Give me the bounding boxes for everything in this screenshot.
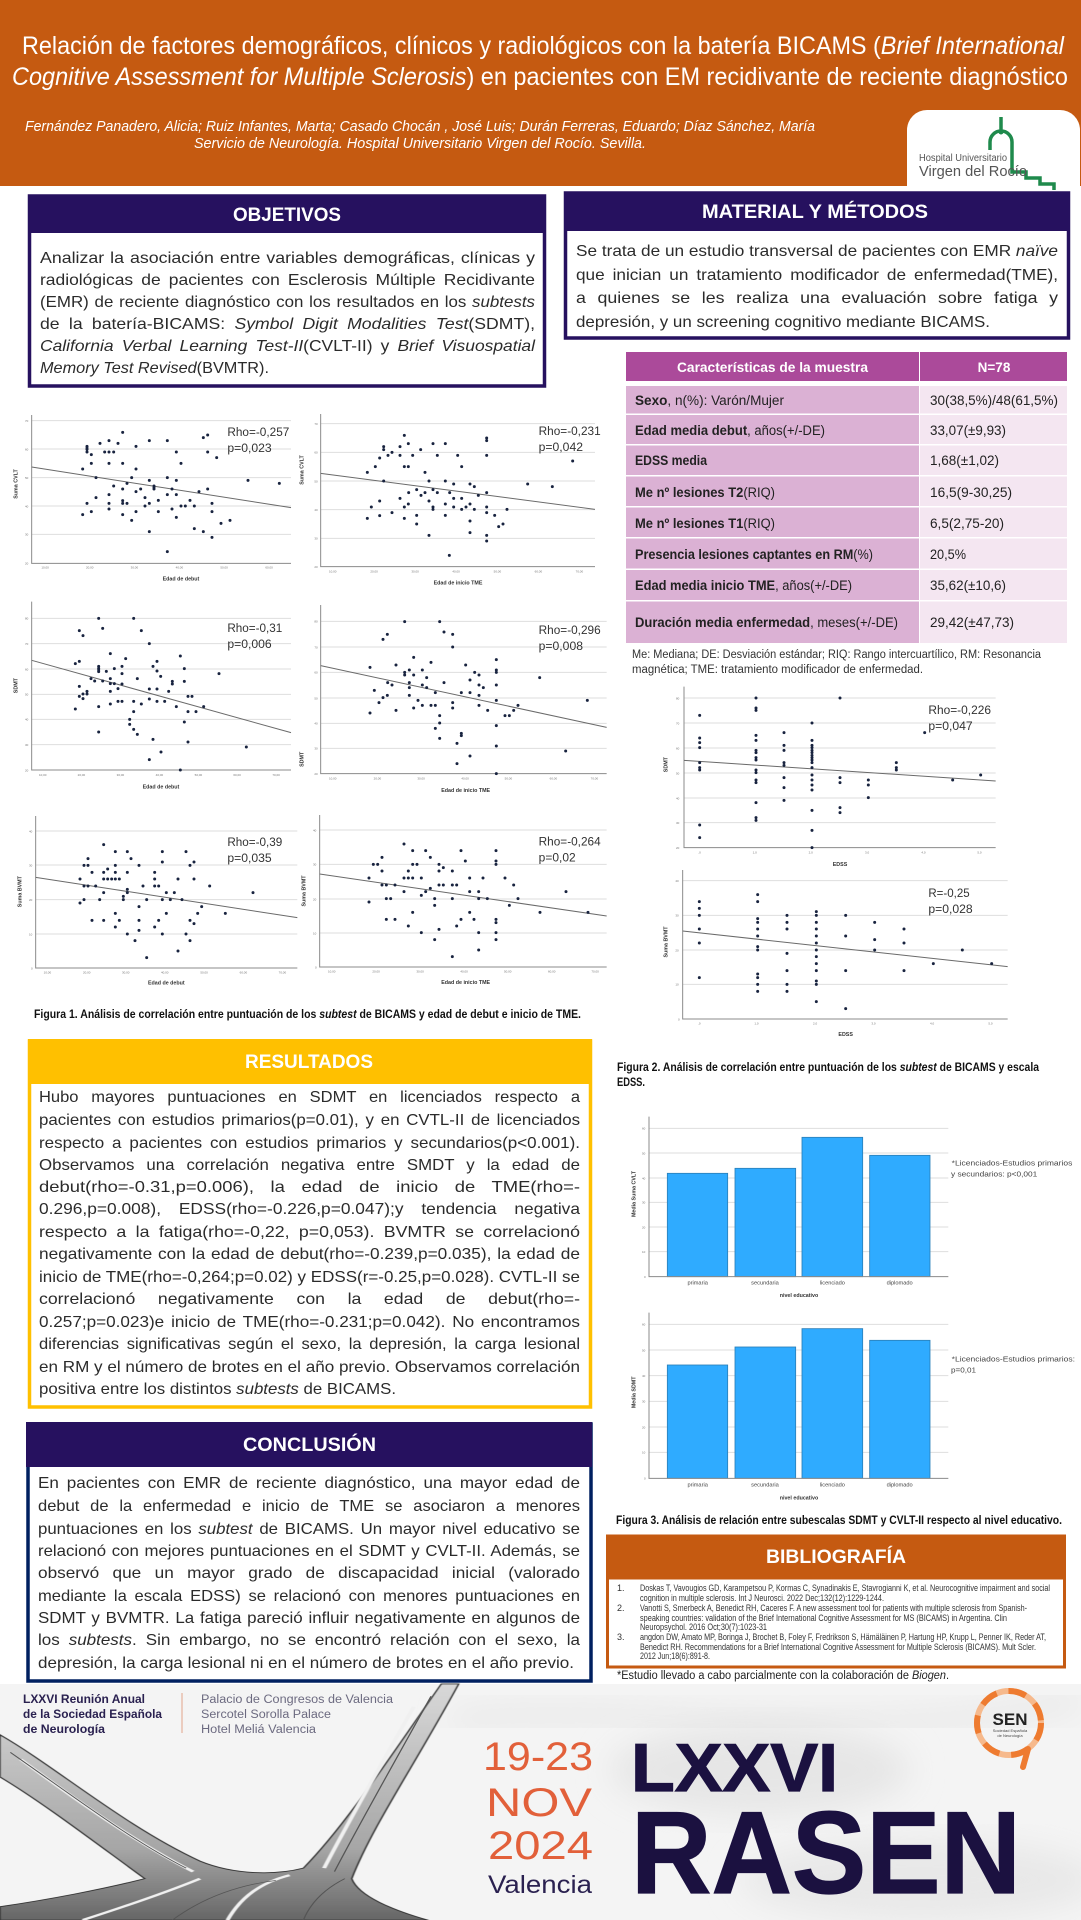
text: resultados: 0.257;p=0.023)e inicio de TME(rho=-0.231;p=0.042). No encontramos bbox=[39, 1314, 580, 1331]
scatter chart: CVLT vs edad de debut: 10,00 bbox=[41, 566, 49, 570]
scatter chart: BVMT vs edad de debut: Rho=-0,39 bbox=[227, 835, 283, 849]
scatter chart: SDMT vs EDSS: 60 bbox=[676, 746, 680, 750]
references: Neuropsychol. 2016 Oct;30(7):1023-31 bbox=[640, 1622, 767, 1632]
hospital logo: Virgen del Rocío bbox=[919, 163, 1027, 180]
text: objetivos: Memory Test Revised(BVMTR). bbox=[40, 360, 269, 377]
text: material y metodos: depresión, y un screening cognitivo mediante BICAMS. bbox=[576, 314, 990, 331]
scatter chart: SDMT vs edad de debut: 30 bbox=[25, 743, 29, 747]
scatter chart: SDMT vs edad de inicio TME: Rho=-0,296 bbox=[539, 623, 601, 637]
scatter chart: BVMT vs edad de debut: 20 bbox=[29, 898, 33, 902]
scatter chart: CVLT vs edad de debut: 40,00 bbox=[176, 566, 183, 570]
heading: material y metodos: MATERIAL Y MÉTODOS bbox=[702, 201, 928, 223]
scatter chart: SDMT vs edad de inicio TME: 80 bbox=[314, 620, 318, 624]
hospital logo bbox=[907, 110, 1080, 190]
scatter chart: BVMT vs edad de inicio TME: 70,00 bbox=[591, 969, 599, 973]
event title: LXXVI bbox=[631, 1730, 838, 1806]
SEN logo: SEN bbox=[993, 1710, 1027, 1729]
scatter chart: SDMT vs edad de inicio TME bbox=[300, 605, 607, 794]
bar chart: media suma CVLT: 40 bbox=[642, 1176, 646, 1180]
text: resultados: en RM y el número de brotes en el año previo. Observamos correlación bbox=[39, 1359, 580, 1376]
scatter chart: SDMT vs EDSS: ,0 bbox=[698, 851, 701, 855]
scatter chart: CVLT vs edad de debut: 70 bbox=[25, 419, 29, 423]
scatter chart: BVMT vs edad de debut: Suma BVMT bbox=[18, 875, 24, 907]
title bbox=[12, 32, 1068, 91]
scatter chart: CVLT vs edad de debut: p=0,023 bbox=[227, 441, 272, 455]
panel: resultados bbox=[28, 1039, 592, 1407]
scatter chart: BVMT vs EDSS: 40 bbox=[675, 879, 679, 883]
scatter chart: CVLT vs edad de inicio TME: 60 bbox=[314, 451, 318, 455]
scatter chart: SDMT vs EDSS: 50 bbox=[676, 771, 680, 775]
scatter chart: BVMT vs EDSS: p=0,028 bbox=[928, 902, 973, 916]
scatter chart: SDMT vs edad de debut: 60 bbox=[25, 667, 29, 671]
bar chart: media SDMT: primaria bbox=[687, 1483, 709, 1489]
table: sample characteristics: 6,5(2,75-20) bbox=[930, 516, 1004, 531]
bar chart: media suma CVLT: 60 bbox=[642, 1127, 646, 1131]
event title: RASEN bbox=[631, 1787, 1021, 1918]
header band bbox=[0, 0, 1081, 190]
panel: objetivos bbox=[28, 195, 546, 386]
scatter chart: BVMT vs EDSS: 4,0 bbox=[930, 1022, 934, 1026]
scatter chart: CVLT vs edad de debut: 30 bbox=[25, 533, 29, 537]
sponsor note: *Estudio llevado a cabo parcialmente con la colaboración de Biogen. bbox=[617, 1670, 949, 1682]
scatter chart: SDMT vs EDSS bbox=[663, 687, 996, 868]
scatter chart: SDMT vs edad de inicio TME: 20 bbox=[314, 772, 318, 776]
table footnote bbox=[632, 649, 1042, 676]
bar chart: media suma CVLT: secundaria bbox=[751, 1280, 780, 1286]
text: objetivos: California Verbal Learning Test-II (CVLT-II) y Brief Visuospatial bbox=[40, 338, 535, 355]
title: Relación de factores demográficos, clínicos y radiológicos con la batería BICAMS (Brief International bbox=[22, 32, 1065, 60]
panel: conclusion bbox=[26, 1422, 592, 1681]
scatter chart: SDMT vs edad de inicio TME: Edad de inicio TME bbox=[441, 788, 491, 794]
references bbox=[617, 1583, 1050, 1661]
scatter chart: SDMT vs edad de inicio TME: 60,00 bbox=[550, 777, 557, 781]
scatter chart: BVMT vs EDSS: ,0 bbox=[698, 1022, 701, 1026]
scatter chart: BVMT vs edad de inicio TME: 20 bbox=[313, 897, 317, 901]
scatter chart: SDMT vs edad de inicio TME: 50 bbox=[314, 696, 318, 700]
bar chart: media SDMT: diplomado bbox=[887, 1483, 913, 1489]
caption: figura 1: Figura 1. Análisis de correlación entre puntuación de los subtest de BICAMS y edad de debut e inicio de TME. bbox=[34, 1009, 581, 1021]
scatter chart: SDMT vs EDSS: p=0,047 bbox=[928, 719, 973, 733]
bar chart: media suma CVLT: 50 bbox=[642, 1151, 646, 1155]
authors: Fernández Panadero, Alicia; Ruiz Infantes, Marta; Casado Chocán , José Luis; Durán Ferreras, Eduardo; Díaz Sánchez, María bbox=[25, 119, 815, 135]
scatter chart: CVLT vs edad de inicio TME: 70 bbox=[314, 422, 318, 426]
bar chart: media SDMT: nivel educativo bbox=[780, 1496, 819, 1502]
scatter chart: SDMT vs EDSS: 40 bbox=[676, 796, 680, 800]
text: material y metodos bbox=[576, 243, 1058, 331]
scatter chart: SDMT vs EDSS: 1,0 bbox=[753, 851, 757, 855]
scatter chart: SDMT vs edad de debut: p=0,006 bbox=[227, 637, 272, 651]
scatter chart: SDMT vs edad de inicio TME: 50,00 bbox=[505, 777, 512, 781]
bar chart: media suma CVLT: y secundarios: p<0,001 bbox=[951, 1171, 1037, 1178]
table: sample characteristics: 16,5(9-30,25) bbox=[930, 485, 1012, 500]
scatter chart: BVMT vs EDSS bbox=[663, 870, 1008, 1038]
scatter chart: BVMT vs edad de debut: 10 bbox=[29, 932, 33, 936]
neuron image bbox=[0, 1684, 459, 1920]
text: resultados: respecto a la fatiga(rho=-0,22, p=0,053). BVMTR se correlacionó bbox=[39, 1224, 580, 1241]
scatter chart: CVLT vs edad de inicio TME: 30 bbox=[314, 537, 318, 541]
scatter chart: BVMT vs edad de debut: 40 bbox=[29, 829, 33, 833]
bar chart: media SDMT: 60 bbox=[642, 1323, 646, 1327]
scatter chart: CVLT vs edad de debut: Rho=-0,257 bbox=[227, 425, 290, 439]
text: resultados: 0.296,p=0.008), EDSS(rho=-0.226,p=0.047);y tendencia negativa bbox=[39, 1201, 580, 1218]
scatter chart: BVMT vs edad de inicio TME: 30,00 bbox=[416, 969, 424, 973]
scatter chart: SDMT vs EDSS: 80 bbox=[676, 696, 680, 700]
scatter chart: SDMT vs edad de debut: 20 bbox=[25, 768, 29, 772]
scatter chart: CVLT vs edad de inicio TME: 40,00 bbox=[452, 569, 460, 573]
scatter chart: BVMT vs EDSS: 3,0 bbox=[871, 1022, 876, 1026]
scatter chart: CVLT vs edad de debut: 40 bbox=[25, 504, 29, 508]
text: resultados: debut(rho=-0.31,p=0.006), la edad de inicio de TME(rho=- bbox=[39, 1179, 580, 1196]
scatter chart: SDMT vs EDSS: 3,0 bbox=[865, 851, 869, 855]
references: 1. bbox=[617, 1583, 625, 1593]
scatter chart: BVMT vs edad de inicio TME: 50,00 bbox=[504, 969, 512, 973]
scatter chart: SDMT vs EDSS: SDMT bbox=[663, 756, 669, 772]
scatter chart: CVLT vs edad de debut: 20 bbox=[25, 562, 29, 566]
bar chart: media suma CVLT: diplomado bbox=[887, 1280, 913, 1286]
table: sample characteristics: Presencia lesiones captantes en RM(%) bbox=[635, 547, 873, 562]
bar chart: media SDMT: secundaria bbox=[751, 1483, 780, 1489]
text: resultados: diferencias significativas según el sexo, la depresión, la carga lesional bbox=[39, 1336, 580, 1353]
scatter chart: BVMT vs edad de inicio TME: 20,00 bbox=[372, 969, 380, 973]
scatter chart: BVMT vs edad de inicio TME: 60,00 bbox=[548, 969, 556, 973]
text: material y metodos: Se trata de un estudio transversal de pacientes con EMR naïve bbox=[576, 243, 1058, 260]
scatter chart: SDMT vs edad de debut: 20,00 bbox=[78, 773, 85, 777]
text: conclusion: relacionó con mejores puntuaciones en el SDMT y CVLT-II. Además, se bbox=[38, 1543, 580, 1560]
scatter chart: BVMT vs edad de inicio TME: 0 bbox=[315, 965, 317, 969]
references: cognition in multiple sclerosis. Int J Neurosci. 2022 Dec;132(12):1229-1244. bbox=[640, 1593, 884, 1603]
bar chart: media SDMT: Media SDMT bbox=[631, 1376, 637, 1408]
authors bbox=[25, 119, 815, 152]
event title bbox=[631, 1730, 1021, 1918]
scatter chart: BVMT vs edad de inicio TME: 40 bbox=[313, 828, 317, 832]
scatter chart: SDMT vs EDSS: 5,0 bbox=[977, 851, 982, 855]
scatter chart: CVLT vs edad de debut: 50,00 bbox=[220, 566, 228, 570]
dates bbox=[483, 1735, 593, 1868]
bar chart: media suma CVLT: licenciado bbox=[820, 1280, 845, 1286]
scatter chart: SDMT vs edad de inicio TME: 40,00 bbox=[461, 777, 469, 781]
SEN logo bbox=[977, 1691, 1041, 1767]
scatter chart: BVMT vs EDSS: Suma BVMT bbox=[663, 926, 669, 958]
scatter chart: BVMT vs EDSS: 0 bbox=[678, 1017, 680, 1021]
text: objetivos: de la batería-BICAMS: Symbol Digit Modalities Test (SDMT), bbox=[40, 316, 535, 333]
bar chart: media SDMT: 0 bbox=[644, 1477, 646, 1481]
panel: bibliografia bbox=[606, 1535, 1066, 1667]
text: resultados: positiva entre los distintos subtests de BICAMS. bbox=[39, 1381, 396, 1398]
panel: material y metodos bbox=[564, 192, 1070, 338]
scatter chart: BVMT vs edad de inicio TME: 40,00 bbox=[460, 969, 468, 973]
text: objetivos: radiológicas de pacientes con Esclerosis Múltiple Recidivante bbox=[40, 272, 535, 289]
scatter chart: SDMT vs edad de debut bbox=[13, 602, 291, 790]
scatter chart: BVMT vs edad de debut: 70,00 bbox=[279, 970, 286, 974]
heading: conclusion: CONCLUSIÓN bbox=[243, 1434, 376, 1456]
scatter chart: BVMT vs edad de inicio TME: Edad de inicio TME bbox=[441, 980, 491, 986]
scatter chart: BVMT vs edad de inicio TME bbox=[302, 815, 607, 986]
scatter chart: CVLT vs edad de debut bbox=[13, 415, 291, 582]
scatter chart: SDMT vs edad de inicio TME: 20,00 bbox=[374, 777, 381, 781]
text: material y metodos: que inician un tratamiento modificador de enfermedad(TME), bbox=[576, 267, 1058, 284]
references: speaking countries: validation of the Brief International Cognitive Assessment for MS (BICAMS) in Argentina. Clin bbox=[640, 1613, 1007, 1623]
scatter chart: BVMT vs EDSS: 5,0 bbox=[988, 1022, 993, 1026]
bar chart: media SDMT: *Licenciados-Estudios primarios: bbox=[952, 1357, 1075, 1364]
title: Cognitive Assessment for Multiple Sclerosis) en pacientes con EM recidivante de reciente diagnóstico bbox=[12, 63, 1068, 91]
scatter chart: BVMT vs EDSS: 10 bbox=[675, 983, 679, 987]
text: conclusion: depresión, la carga lesional ni en el número de brotes en el año previo. bbox=[38, 1655, 574, 1672]
scatter chart: BVMT vs edad de debut: 0 bbox=[31, 966, 33, 970]
scatter chart: CVLT vs edad de inicio TME: 40 bbox=[314, 508, 318, 512]
scatter chart: CVLT vs edad de inicio TME: 60,00 bbox=[535, 569, 542, 573]
scatter chart: CVLT vs edad de inicio TME: Suma CVLT bbox=[300, 455, 306, 485]
text: conclusion: los subtests. Sin embargo, no se encontró relación con el sexo, la bbox=[38, 1632, 580, 1649]
scatter chart: SDMT vs edad de debut: Edad de debut bbox=[143, 784, 180, 790]
text: resultados: inicio de TME(rho=-0,264;p=0.02) y EDSS(r=-0.25,p=0.028). CVTL-II se bbox=[39, 1269, 580, 1286]
bar chart: media suma CVLT bbox=[631, 1117, 1073, 1299]
scatter chart: CVLT vs edad de inicio TME: 50 bbox=[314, 479, 318, 483]
SEN logo: de Neurología bbox=[997, 1733, 1023, 1738]
scatter chart: BVMT vs EDSS: 30 bbox=[675, 914, 679, 918]
scatter chart: CVLT vs edad de inicio TME: Edad de inicio TME bbox=[434, 580, 483, 586]
text: conclusion: puntuaciones en los subtest de BICAMS. Un mayor nivel educativo se bbox=[38, 1521, 580, 1538]
bar chart: media suma CVLT: 30 bbox=[642, 1201, 646, 1205]
text: conclusion: SDMT y BVMTR. La fatiga pareció influir negativamente en algunos de bbox=[38, 1610, 580, 1627]
congress name: de Neurología bbox=[23, 1724, 106, 1736]
scatter chart: SDMT vs edad de debut: 50,00 bbox=[195, 773, 202, 777]
references: 3. bbox=[617, 1632, 625, 1642]
heading: objetivos: OBJETIVOS bbox=[233, 205, 341, 226]
scatter chart: SDMT vs EDSS: EDSS bbox=[833, 862, 848, 868]
congress name: de la Sociedad Española bbox=[23, 1709, 163, 1721]
text: objetivos: (EMR) de reciente diagnóstico con los resultados en los subtests bbox=[40, 294, 535, 311]
text: conclusion: debut de la enfermedad e inicio de TME se asociaron a menores bbox=[38, 1498, 580, 1515]
scatter chart: SDMT vs edad de debut: 80 bbox=[25, 617, 29, 621]
SEN logo: Sociedad Española bbox=[993, 1728, 1028, 1733]
scatter chart: SDMT vs edad de inicio TME: 30,00 bbox=[417, 777, 425, 781]
scatter chart: SDMT vs edad de debut: 70 bbox=[25, 642, 29, 646]
bar chart: media suma CVLT: nivel educativo bbox=[780, 1293, 819, 1299]
scatter chart: SDMT vs edad de inicio TME: p=0,008 bbox=[539, 639, 583, 653]
scatter chart: SDMT vs edad de inicio TME: 70,00 bbox=[591, 777, 598, 781]
venues: Palacio de Congresos de Valencia bbox=[201, 1694, 394, 1706]
bar chart: media SDMT: p=0,01 bbox=[951, 1367, 976, 1374]
bar chart: media SDMT: 30 bbox=[642, 1400, 646, 1404]
scatter chart: SDMT vs EDSS: 30 bbox=[676, 821, 680, 825]
venues: Sercotel Sorolla Palace bbox=[201, 1709, 331, 1721]
table: sample characteristics: Duración media enfermedad, meses(+/-DE) bbox=[635, 615, 898, 630]
references: 2. bbox=[617, 1603, 625, 1613]
table: sample characteristics: N=78 bbox=[978, 360, 1011, 375]
scatter chart: SDMT vs edad de inicio TME: 30 bbox=[314, 747, 318, 751]
scatter chart: SDMT vs EDSS: Rho=-0,226 bbox=[928, 703, 991, 717]
city: Valencia bbox=[488, 1871, 592, 1899]
caption: figura 2 bbox=[617, 1062, 1040, 1089]
scatter chart: SDMT vs edad de debut: SDMT bbox=[13, 677, 19, 693]
text: resultados: Observamos una correlación negativa entre SMDT y la edad de bbox=[39, 1157, 580, 1174]
bar chart: media SDMT: 50 bbox=[642, 1348, 646, 1352]
table: sample characteristics: Sexo, n(%): Varón/Mujer bbox=[635, 393, 784, 408]
venues: Hotel Meliá Valencia bbox=[201, 1724, 317, 1736]
scatter chart: CVLT vs edad de debut: 20,00 bbox=[86, 566, 94, 570]
scatter chart: BVMT vs edad de debut: 30 bbox=[29, 863, 33, 867]
scatter chart: SDMT vs EDSS: 4,0 bbox=[921, 851, 926, 855]
text: resultados bbox=[39, 1089, 580, 1398]
congress name: LXXVI Reunión Anual bbox=[23, 1694, 145, 1706]
scatter chart: BVMT vs EDSS: R=-0,25 bbox=[928, 886, 970, 900]
scatter chart: BVMT vs edad de debut: Edad de debut bbox=[148, 981, 185, 987]
scatter chart: BVMT vs edad de inicio TME: Rho=-0,264 bbox=[539, 834, 601, 848]
text: resultados: correlacionó negativamente con la edad de debut(rho=- bbox=[39, 1291, 580, 1308]
dates: NOV bbox=[486, 1781, 592, 1825]
scatter chart: SDMT vs EDSS: 20 bbox=[676, 846, 680, 850]
scatter chart: BVMT vs edad de inicio TME: 10 bbox=[313, 931, 317, 935]
scatter chart: SDMT vs edad de inicio TME: 70 bbox=[314, 645, 318, 649]
table: sample characteristics bbox=[626, 352, 1067, 643]
scatter chart: BVMT vs edad de debut: 10,00 bbox=[44, 970, 51, 974]
venues bbox=[201, 1694, 394, 1736]
scatter chart: SDMT vs edad de inicio TME: 60 bbox=[314, 671, 318, 675]
scatter chart: SDMT vs edad de debut: 50 bbox=[25, 693, 29, 697]
bar chart: media suma CVLT: 0 bbox=[644, 1275, 646, 1279]
scatter chart: CVLT vs edad de inicio TME: 70,00 bbox=[576, 569, 583, 573]
table: sample characteristics: Edad media debut, años(+/-DE) bbox=[635, 423, 825, 438]
text: objetivos bbox=[40, 250, 535, 377]
text: resultados: Hubo mayores puntuaciones en SDMT en licenciados respecto a bbox=[39, 1089, 580, 1106]
scatter chart: SDMT vs edad de inicio TME: SDMT bbox=[300, 751, 306, 767]
text: resultados: respecto a pacientes con estudios primarios y secundarios(p<0.001). bbox=[39, 1135, 580, 1152]
bar chart: media suma CVLT: *Licenciados-Estudios primarios bbox=[952, 1161, 1073, 1168]
table: sample characteristics: 20,5% bbox=[930, 547, 966, 562]
bar chart: media SDMT: 20 bbox=[642, 1425, 646, 1429]
text: resultados: pacientes con estudios primarios(p=0.01), y en CVTL-II de licenciados bbox=[39, 1112, 580, 1129]
dates: 2024 bbox=[488, 1824, 593, 1868]
dates: 19-23 bbox=[483, 1735, 593, 1779]
scatter chart: BVMT vs edad de inicio TME: p=0,02 bbox=[539, 850, 576, 864]
scatter chart: BVMT vs edad de inicio TME: 30 bbox=[313, 863, 317, 867]
bar chart: media suma CVLT: 10 bbox=[642, 1250, 646, 1254]
scatter chart: CVLT vs edad de debut: 50 bbox=[25, 476, 29, 480]
text: conclusion bbox=[38, 1475, 580, 1672]
table: sample characteristics: 29,42(±47,73) bbox=[930, 615, 1014, 630]
table: sample characteristics: EDSS media bbox=[635, 453, 707, 468]
scatter chart: CVLT vs edad de debut: 30,00 bbox=[131, 566, 138, 570]
scatter chart: CVLT vs edad de inicio TME: 20,00 bbox=[370, 569, 378, 573]
scatter chart: BVMT vs EDSS: EDSS bbox=[838, 1032, 853, 1038]
bar chart: media SDMT: 10 bbox=[642, 1451, 646, 1455]
scatter chart: BVMT vs EDSS: 2,0 bbox=[813, 1022, 817, 1026]
hospital logo: Hospital Universitario bbox=[919, 153, 1007, 164]
table: sample characteristics: Me nº lesiones T2(RIQ) bbox=[635, 485, 775, 500]
scatter chart: SDMT vs edad de debut: 10,00 bbox=[39, 773, 47, 777]
heading: bibliografia: BIBLIOGRAFÍA bbox=[766, 1546, 906, 1568]
scatter chart: BVMT vs EDSS: 1,0 bbox=[754, 1022, 759, 1026]
scatter chart: CVLT vs edad de inicio TME: p=0,042 bbox=[539, 440, 583, 454]
scatter chart: SDMT vs edad de inicio TME: 10,00 bbox=[329, 777, 337, 781]
text: resultados: negativamente con la edad de debut(rho=-0.239,p=0.035), la edad de bbox=[39, 1246, 580, 1263]
table: sample characteristics: Características de la muestra bbox=[677, 360, 868, 375]
bar chart: media suma CVLT: 20 bbox=[642, 1225, 646, 1229]
footer banner bbox=[0, 1684, 1081, 1920]
scatter chart: SDMT vs edad de debut: 70,00 bbox=[272, 773, 280, 777]
scatter chart: SDMT vs edad de inicio TME: 40 bbox=[314, 722, 318, 726]
scatter chart: BVMT vs edad de debut: 20,00 bbox=[83, 970, 91, 974]
scatter chart: SDMT vs EDSS: 70 bbox=[676, 721, 680, 725]
congress name bbox=[23, 1694, 163, 1736]
table: sample characteristics: 30(38,5%)/48(61,5%) bbox=[930, 393, 1058, 408]
scatter chart: CVLT vs edad de inicio TME: 20 bbox=[314, 565, 318, 569]
caption: figura 2: EDSS. bbox=[617, 1077, 645, 1089]
scatter chart: SDMT vs edad de debut: Rho=-0,31 bbox=[227, 621, 283, 635]
scatter chart: CVLT vs edad de inicio TME: 10,00 bbox=[329, 569, 337, 573]
scatter chart: SDMT vs edad de debut: 40 bbox=[25, 718, 29, 722]
table footnote: Me: Mediana; DE: Desviación estándar; RIQ: Rango intercuartílico, RM: Resonancia bbox=[632, 649, 1042, 661]
bar chart: media suma CVLT: primaria bbox=[687, 1280, 709, 1286]
table: sample characteristics: 33,07(±9,93) bbox=[930, 423, 1006, 438]
table: sample characteristics: 35,62(±10,6) bbox=[930, 578, 1006, 593]
scatter chart: SDMT vs EDSS: 2,0 bbox=[809, 851, 813, 855]
scatter chart: BVMT vs edad de debut: 60,00 bbox=[240, 970, 247, 974]
scatter chart: BVMT vs edad de debut: 50,00 bbox=[200, 970, 208, 974]
scatter chart: BVMT vs EDSS: 20 bbox=[675, 948, 679, 952]
table footnote: magnética; TME: tratamiento modificador de enfermedad. bbox=[632, 664, 923, 676]
scatter chart: CVLT vs edad de inicio TME: 30,00 bbox=[411, 569, 419, 573]
text: objetivos: Analizar la asociación entre variables demográficas, clínicas y bbox=[40, 250, 535, 267]
scatter chart: CVLT vs edad de debut: 60 bbox=[25, 447, 29, 451]
scatter chart: CVLT vs edad de inicio TME: Rho=-0,231 bbox=[539, 424, 601, 438]
scatter chart: SDMT vs edad de debut: 30,00 bbox=[117, 773, 124, 777]
bar chart: media SDMT: 40 bbox=[642, 1374, 646, 1378]
scatter chart: SDMT vs edad de debut: 40,00 bbox=[156, 773, 163, 777]
scatter chart: CVLT vs edad de debut: Suma CVLT bbox=[13, 469, 19, 499]
bar chart: media SDMT: licenciado bbox=[820, 1483, 845, 1489]
scatter chart: BVMT vs edad de debut: p=0,035 bbox=[227, 851, 272, 865]
authors: Servicio de Neurología. Hospital Universitario Virgen del Rocío. Sevilla. bbox=[194, 136, 646, 152]
text: conclusion: mediante la escala EDSS) se relacionó con menores puntuaciones en bbox=[38, 1588, 580, 1605]
text: conclusion: observó que un mayor grado de discapacidad inicial (valorado bbox=[38, 1565, 580, 1582]
scatter chart: BVMT vs edad de debut: 30,00 bbox=[122, 970, 130, 974]
scatter chart: CVLT vs edad de inicio TME: 50,00 bbox=[494, 569, 501, 573]
caption: figura 2: Figura 2. Análisis de correlación entre puntuación de los subtest de BICAMS y escala bbox=[617, 1062, 1040, 1074]
text: conclusion: En pacientes con EMR de reciente diagnóstico, una mayor edad de bbox=[38, 1475, 580, 1492]
references: 2012 Jun;18(6):891-8. bbox=[640, 1651, 710, 1661]
scatter chart: BVMT vs edad de inicio TME: Suma BVMT bbox=[302, 875, 308, 907]
bar chart: media suma CVLT: Media Suma CVLT bbox=[631, 1170, 637, 1217]
table: sample characteristics: 1,68(±1,02) bbox=[930, 453, 999, 468]
scatter chart: SDMT vs edad de debut: 60,00 bbox=[233, 773, 241, 777]
scatter chart: BVMT vs edad de debut: 40,00 bbox=[161, 970, 169, 974]
table: sample characteristics: Edad media inicio TME, años(+/-DE) bbox=[635, 578, 852, 593]
table: sample characteristics: Me nº lesiones T1(RIQ) bbox=[635, 516, 775, 531]
text: material y metodos: a quienes se les realiza una evaluación sobre fatiga y bbox=[576, 290, 1058, 307]
bar chart: media SDMT bbox=[631, 1313, 1075, 1502]
scatter chart: CVLT vs edad de debut: Edad de debut bbox=[163, 576, 200, 582]
scatter chart: BVMT vs edad de debut bbox=[18, 816, 297, 987]
heading: resultados: RESULTADOS bbox=[245, 1052, 373, 1073]
scatter chart: CVLT vs edad de inicio TME bbox=[300, 414, 601, 586]
scatter chart: BVMT vs edad de inicio TME: 10,00 bbox=[328, 969, 336, 973]
scatter chart: CVLT vs edad de debut: 60,00 bbox=[265, 566, 273, 570]
